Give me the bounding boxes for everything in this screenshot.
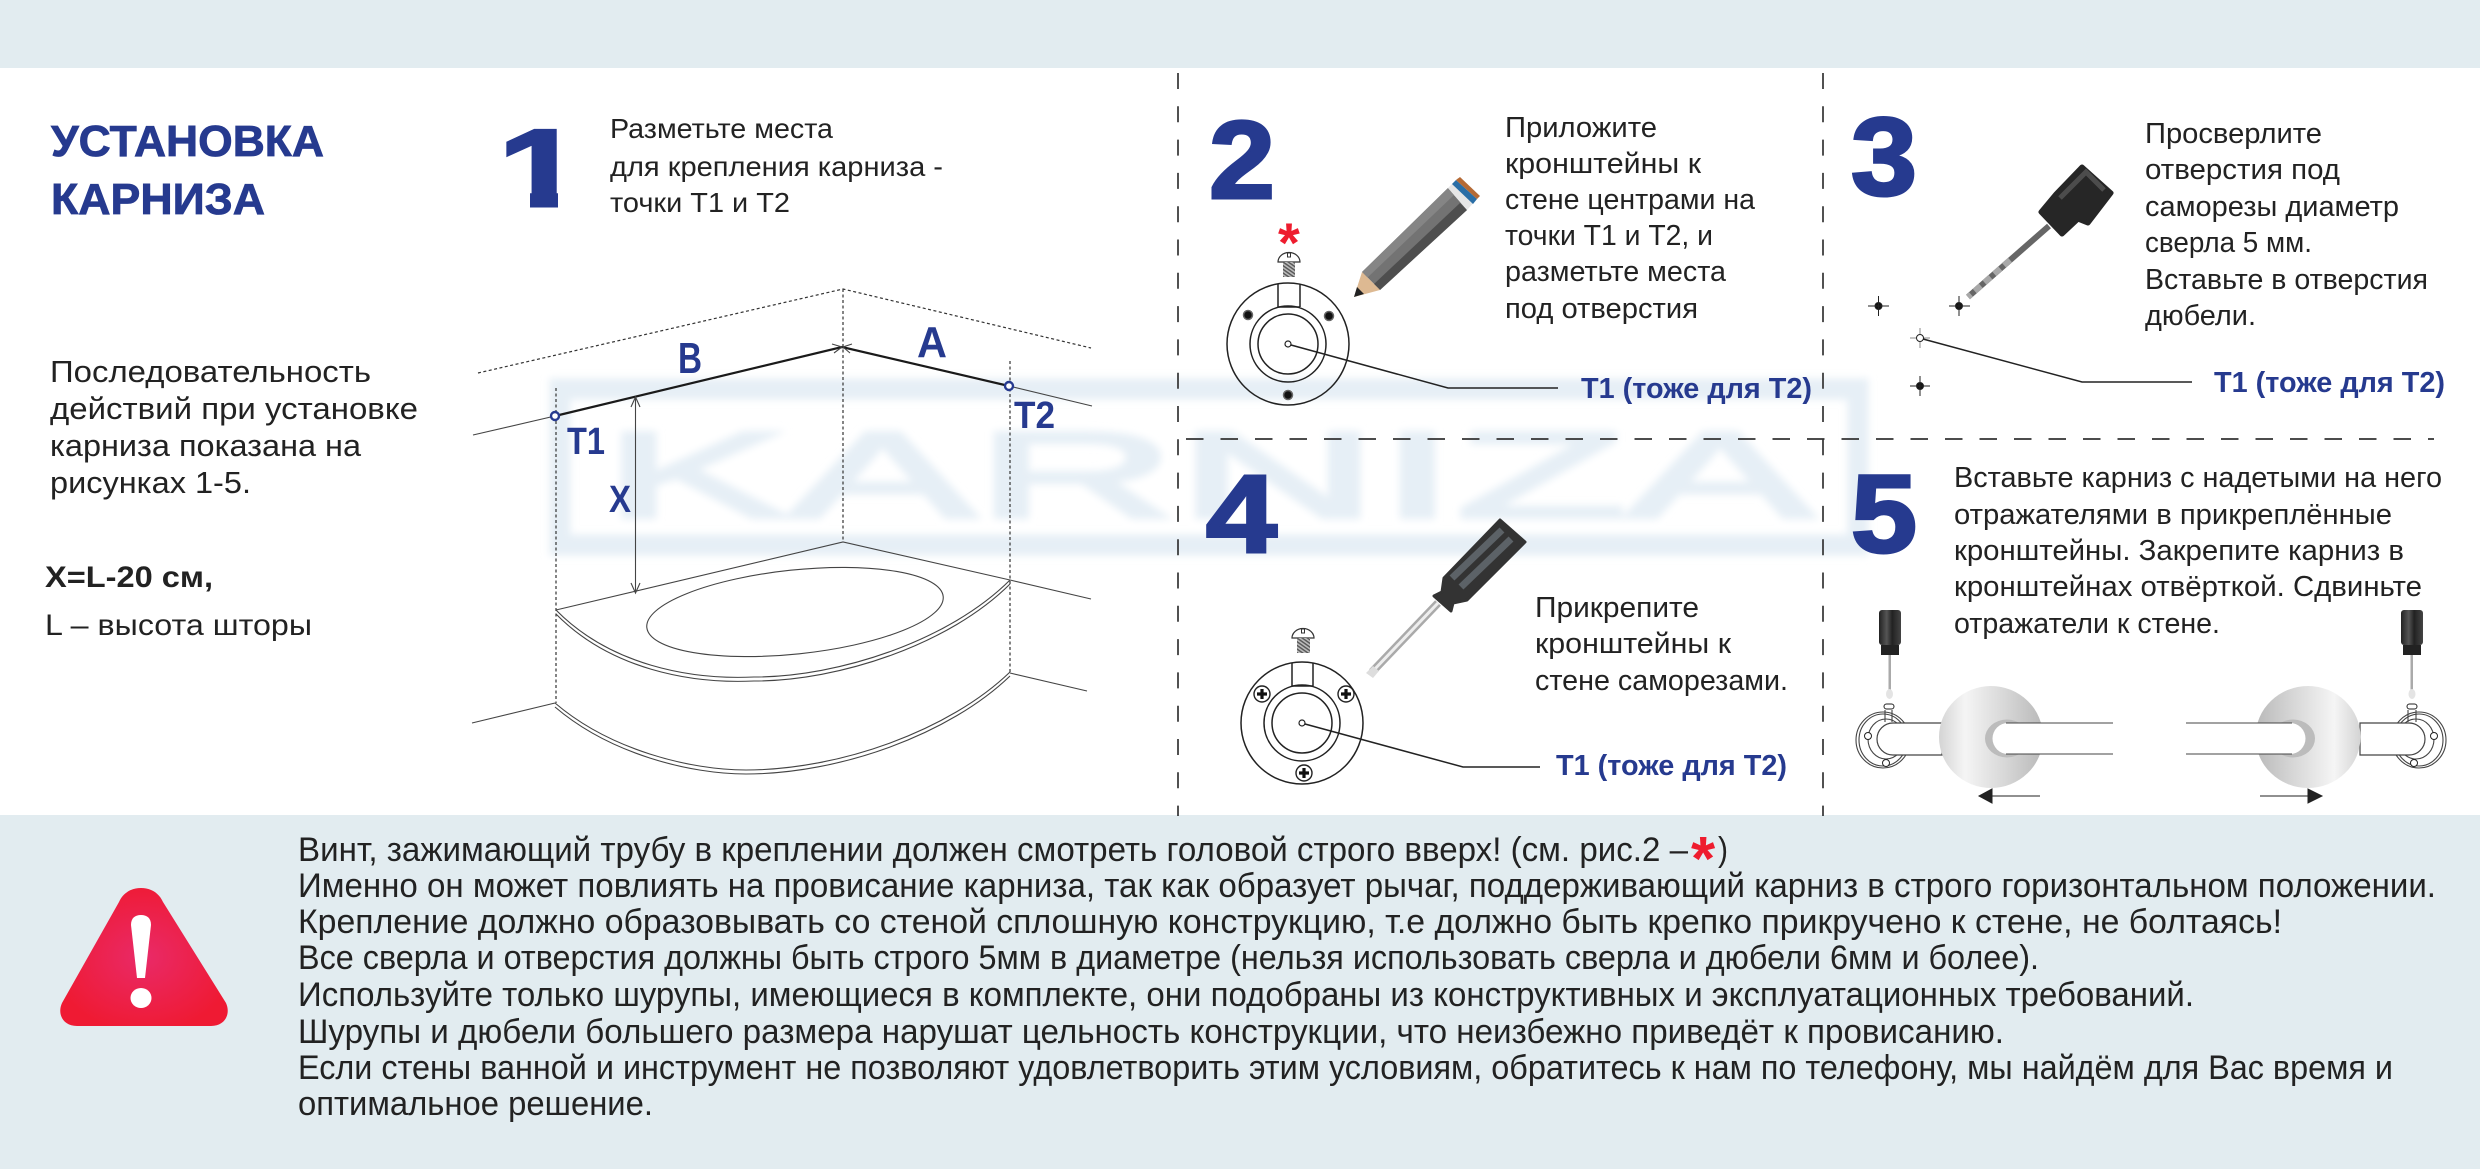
panel: step 1: [472, 107, 1092, 774]
icon: screw: [1292, 628, 1314, 653]
right tube: [2186, 720, 2315, 758]
T1 label: Т1 (тоже для Т2): [1556, 750, 1787, 782]
icon: pencil: [1354, 177, 1480, 297]
formula: X=L-20 см,: [45, 561, 213, 594]
icon: bracket with holes: [1227, 283, 1349, 405]
step 2 text: Приложите: [1505, 112, 1657, 144]
panel: step 2: [1209, 99, 1812, 405]
step 3 text: [2145, 118, 2428, 332]
step 2 text: стене центрами на: [1505, 184, 1756, 216]
T1 label: Т1 (тоже для Т2): [1581, 373, 1812, 405]
step 2 text: точки Т1 и Т2, и: [1505, 220, 1713, 252]
intro text: карниза показана на: [50, 428, 362, 463]
arrow right: [2260, 789, 2322, 803]
step 2 text: кронштейны к: [1505, 148, 1701, 180]
warning text: Шурупы и дюбели большего размера нарушат цельность конструкции, что неизбежно приведёт к провисанию.: [298, 1013, 2004, 1051]
icon: bracket with screws: [1241, 662, 1363, 784]
step 1 text: точки Т1 и Т2: [610, 187, 790, 218]
leader line: [1305, 724, 1540, 767]
step 1 text: Разметьте места: [610, 113, 833, 144]
dimension labels: T1: [567, 421, 605, 463]
formula: [45, 561, 312, 642]
bath drawing: [472, 289, 1092, 774]
step 5 text: кронштейны. Закрепите карниз в: [1954, 535, 2404, 567]
panel: step 5: [1851, 453, 2446, 803]
left reflector: [1939, 686, 2043, 788]
panel dividers: [1178, 73, 2434, 816]
step 1 text: для крепления карниза -: [610, 151, 943, 182]
step 3 text: отверстия под: [2145, 154, 2340, 186]
dimension labels: B: [678, 334, 702, 383]
left bracket: [1856, 704, 1942, 768]
icon: marking points: [1868, 296, 1970, 396]
panel: step 3: [1851, 96, 2445, 399]
leader line: [1291, 345, 1558, 388]
right screwdriver: [2401, 610, 2423, 699]
step number 4: 4: [1206, 453, 1277, 576]
warning text: Если стены ванной и инструмент не позволяют удовлетворить этим условиям, обратитесь к нам по телефону, мы найдём для Вас время и: [298, 1049, 2393, 1087]
arrow left: [1979, 789, 2040, 803]
panel: step 4: [1206, 453, 1788, 784]
T1 label: Т1 (тоже для Т2): [2214, 367, 2445, 399]
warning text: Крепление должно образовывать со стеной сплошную конструкцию, т.е должно быть крепко прикручено к стене, не болтаясь!: [298, 903, 2282, 941]
left screwdriver: [1879, 610, 1901, 699]
top band: [0, 0, 2480, 68]
icon: drill: [1968, 167, 2111, 297]
warning text: Все сверла и отверстия должны быть строго 5мм в диаметре (нельзя использовать сверла и дюбели 6мм и более).: [298, 939, 2039, 977]
intro text: [50, 354, 418, 500]
heading: [51, 117, 324, 224]
dimension labels: [567, 318, 1055, 521]
formula: L – высота шторы: [45, 609, 312, 642]
step number 1: 1: [498, 107, 583, 230]
heading: КАРНИЗА: [51, 175, 265, 224]
heading: УСТАНОВКА: [51, 117, 324, 166]
bottom band: [0, 815, 2480, 1169]
warning text: ): [1718, 831, 1728, 869]
step 3 text: дюбели.: [2145, 300, 2256, 332]
step 4 text: Прикрепите: [1535, 592, 1699, 624]
left tube: [1985, 720, 2113, 758]
warning text: Используйте только шурупы, имеющиеся в комплекте, они подобраны из конструктивных и эксплуатационных требований.: [298, 976, 2194, 1014]
warning text: Винт, зажимающий трубу в креплении должен смотреть головой строго вверх! (см. рис.2 –: [298, 831, 1688, 869]
icon: warning triangle: [60, 888, 228, 1026]
icon: screw: [1278, 252, 1300, 277]
step 3 text: Просверлите: [2145, 118, 2322, 150]
step 5 text: Вставьте карниз с надетыми на него: [1954, 462, 2442, 494]
red star: *: [1691, 825, 1716, 894]
right bracket: [2360, 704, 2446, 768]
intro text: рисунках 1-5.: [50, 465, 251, 500]
leader line: [1923, 339, 2192, 382]
dimension labels: X: [609, 479, 632, 521]
step 2 text: [1505, 112, 1756, 325]
step 2 text: под отверстия: [1505, 293, 1698, 325]
watermark: KARNIZA logo: [560, 389, 1858, 545]
right reflector: [2256, 686, 2360, 788]
intro text: действий при установке: [50, 391, 418, 426]
intro text: Последовательность: [50, 354, 371, 389]
step number 3: 3: [1851, 96, 1917, 219]
watermark: KARNIZA logo: KARNIZA: [603, 407, 1814, 543]
icon: screwdriver: [1366, 520, 1525, 678]
dimension lines: [555, 347, 1009, 416]
step 5 text: кронштейнах отвёрткой. Сдвиньте: [1954, 571, 2422, 603]
warning text: Именно он может повлиять на провисание карниза, так как образует рычаг, поддерживающий карниз в строго горизонтальном положении.: [298, 867, 2436, 905]
left assembly: [1856, 610, 2113, 803]
warning text: оптимальное решение.: [298, 1085, 653, 1123]
step number 5: 5: [1851, 453, 1917, 576]
dimension labels: A: [917, 318, 947, 367]
step 5 text: отражатели к стене.: [1954, 608, 2220, 640]
right assembly: [2186, 610, 2446, 803]
step 4 text: стене саморезами.: [1535, 665, 1788, 697]
step 1 text: [610, 113, 943, 218]
step number 2: 2: [1209, 99, 1275, 222]
step 3 text: Вставьте в отверстия: [2145, 264, 2428, 296]
callout star: *: [1278, 211, 1300, 274]
step 3 text: сверла 5 мм.: [2145, 227, 2312, 259]
step 5 text: отражателями в прикреплённые: [1954, 499, 2392, 531]
dimension labels: T2: [1014, 395, 1055, 437]
step 5 text: [1954, 462, 2442, 640]
step 4 text: [1535, 592, 1788, 697]
step 4 text: кронштейны к: [1535, 628, 1731, 660]
step 3 text: саморезы диаметр: [2145, 191, 2399, 223]
step 2 text: разметьте места: [1505, 256, 1727, 288]
warning text: [298, 825, 2436, 1123]
